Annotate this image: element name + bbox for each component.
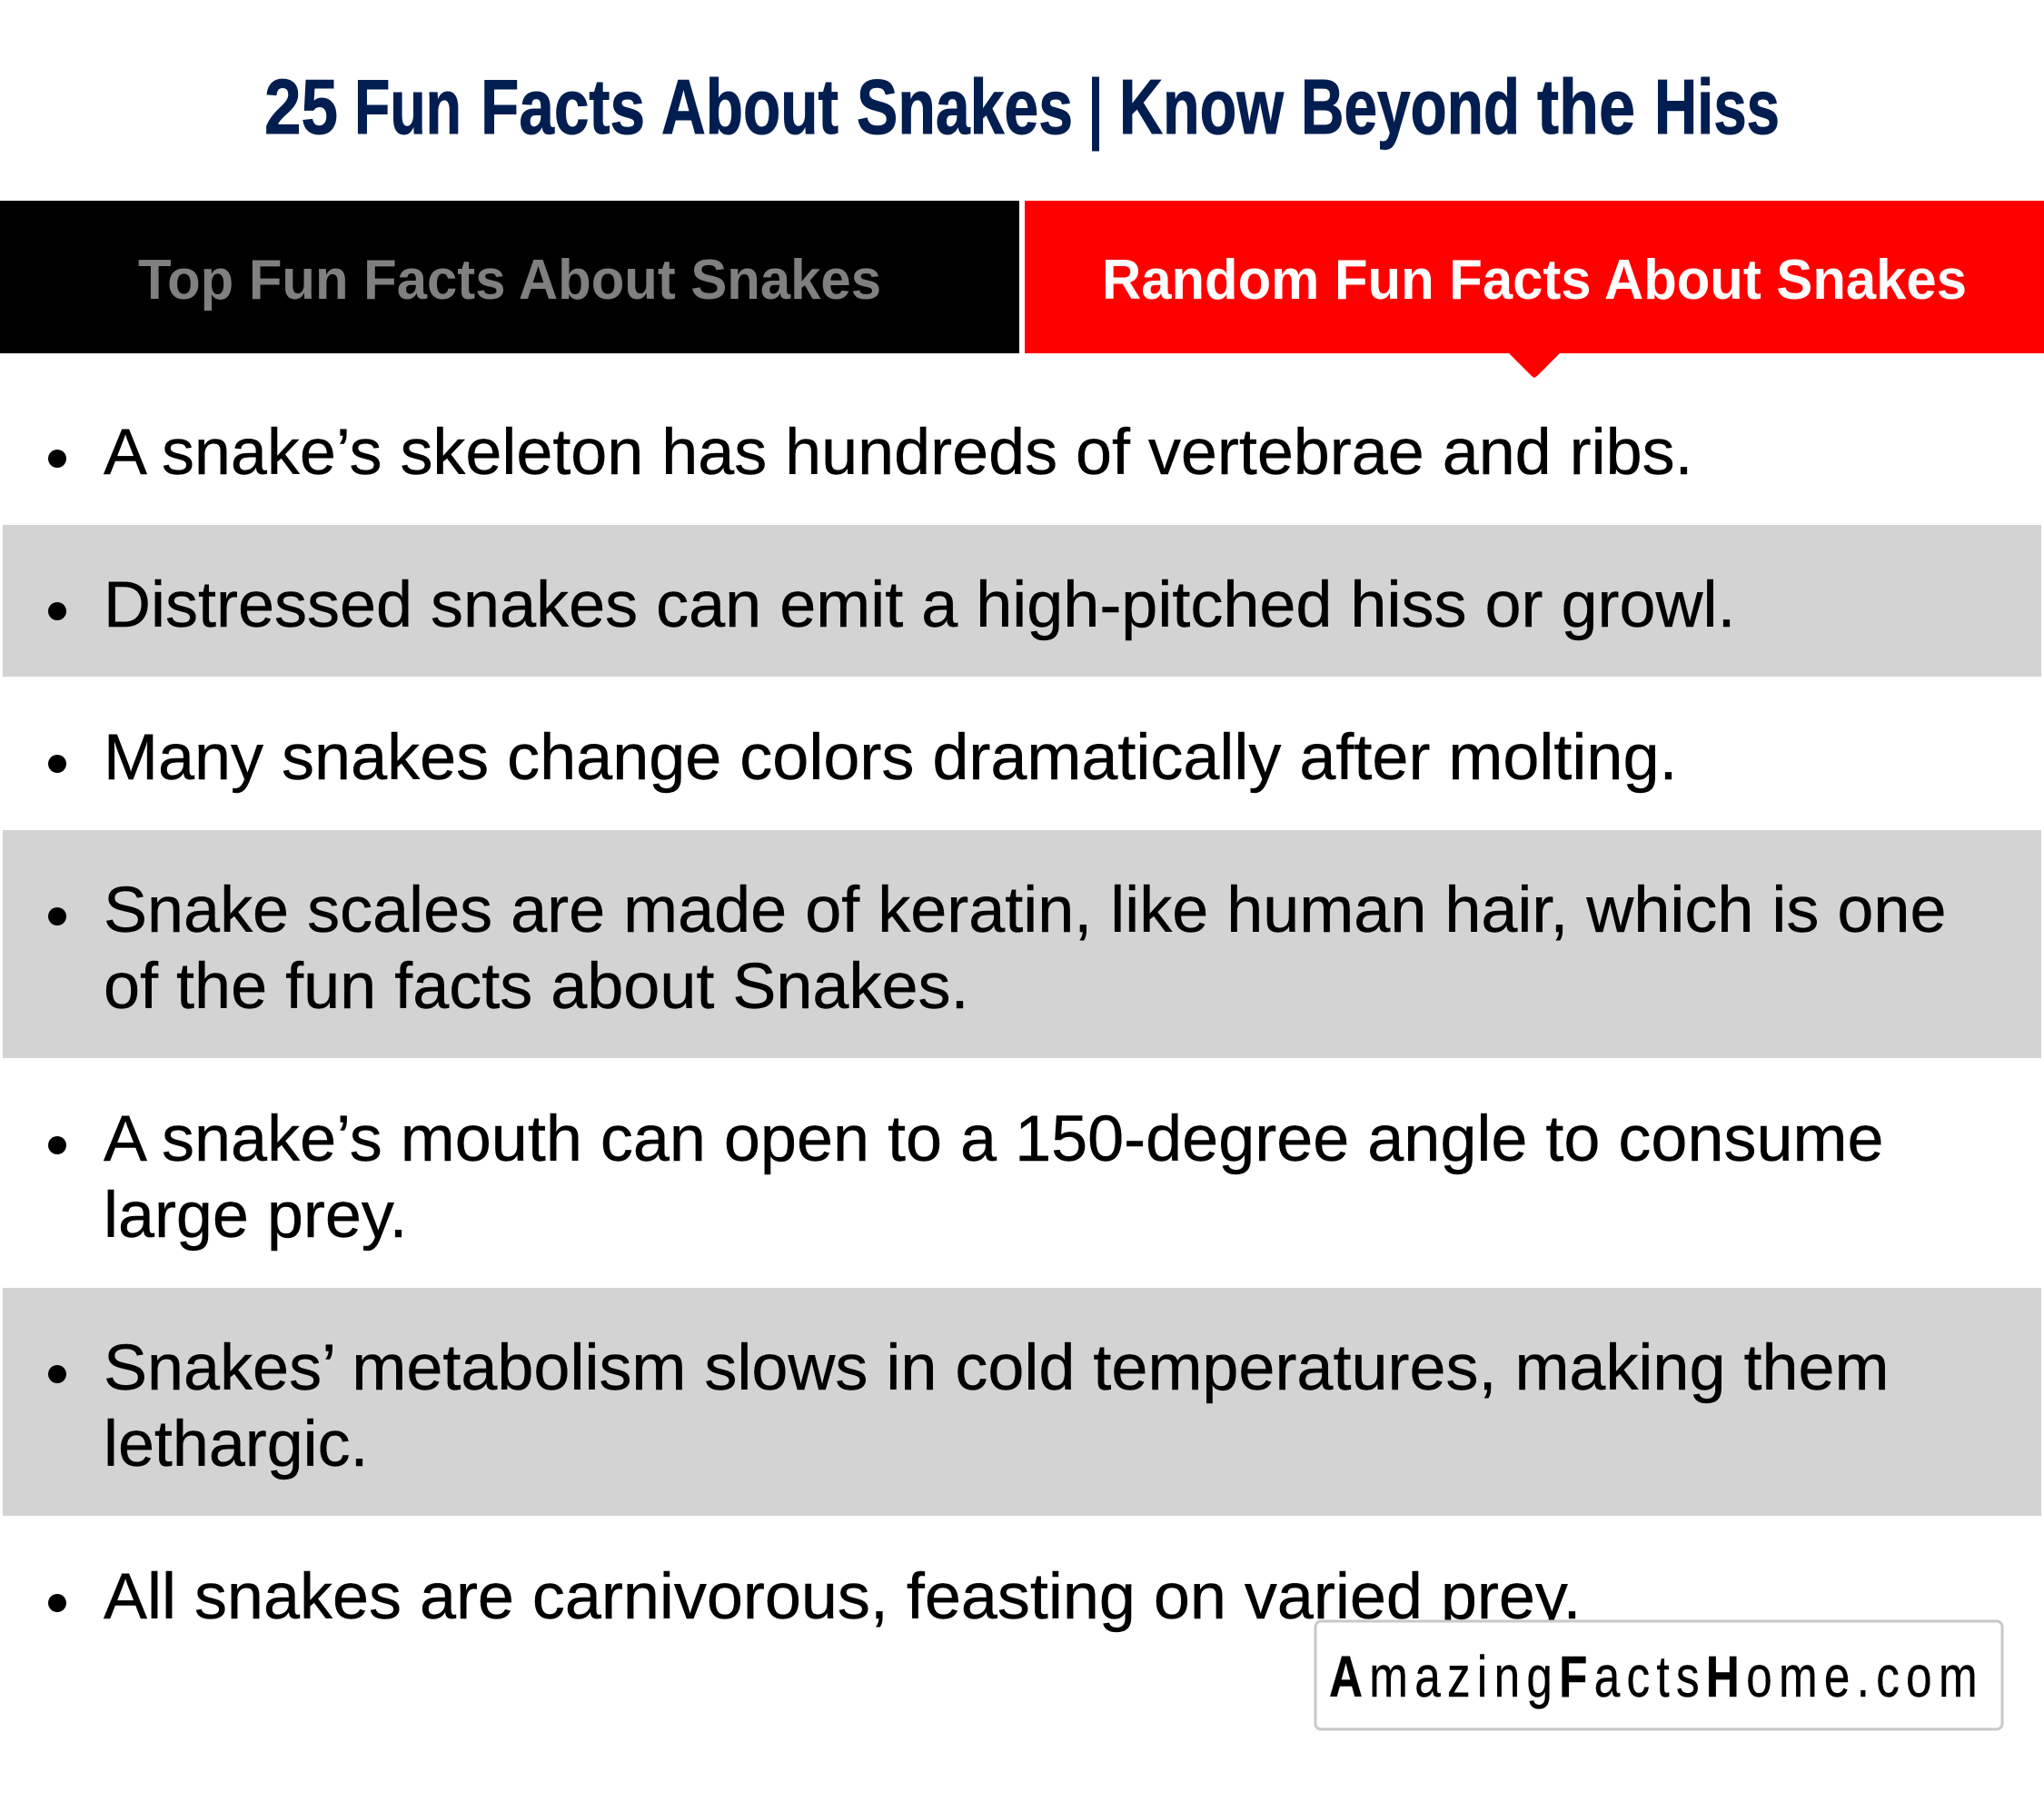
tab: random fun facts (active): Random Fun Facts About Snakes xyxy=(1102,249,1967,312)
title: Know xyxy=(1119,64,1285,151)
row 5 xyxy=(48,1103,1884,1252)
tab: random fun facts (active) xyxy=(1025,201,2044,378)
title: Beyond xyxy=(1301,64,1520,151)
title: Facts xyxy=(481,64,645,151)
watermark badge: AmazingFactsHome.com xyxy=(1329,1646,1978,1709)
row 4: Snake scales are made of keratin, like human hair, which is one xyxy=(104,875,1946,946)
row 4 xyxy=(3,830,2041,1058)
title: 25 xyxy=(264,64,338,151)
row 2: Distressed snakes can emit a high-pitched hiss or growl. xyxy=(104,569,1735,641)
row 6: Snakes’ metabolism slows in cold temperatures, making them xyxy=(104,1332,1890,1404)
title: the xyxy=(1537,64,1635,151)
title: | xyxy=(1088,64,1103,151)
title xyxy=(264,64,1780,151)
row 5: A snake’s mouth can open to a 150-degree angle to consume xyxy=(104,1103,1884,1175)
row 6: lethargic. xyxy=(104,1409,369,1480)
row 6 xyxy=(3,1288,2041,1516)
row 5: large prey. xyxy=(104,1180,408,1252)
tab: top fun facts: Top Fun Facts About Snakes xyxy=(138,249,881,312)
title: About xyxy=(661,64,838,151)
title: Snakes xyxy=(857,64,1073,151)
row 3: Many snakes change colors dramatically after molting. xyxy=(104,722,1677,794)
watermark badge xyxy=(1315,1621,2002,1729)
row 2 xyxy=(3,525,2041,677)
title: Hiss xyxy=(1654,64,1780,151)
row 7: All snakes are carnivorous, feasting on varied prey. xyxy=(104,1561,1581,1633)
tab: top fun facts xyxy=(0,201,1019,353)
row 4: of the fun facts about Snakes. xyxy=(104,951,968,1023)
row 1: A snake’s skeleton has hundreds of vertebrae and ribs. xyxy=(104,417,1693,489)
title: Fun xyxy=(354,64,461,151)
